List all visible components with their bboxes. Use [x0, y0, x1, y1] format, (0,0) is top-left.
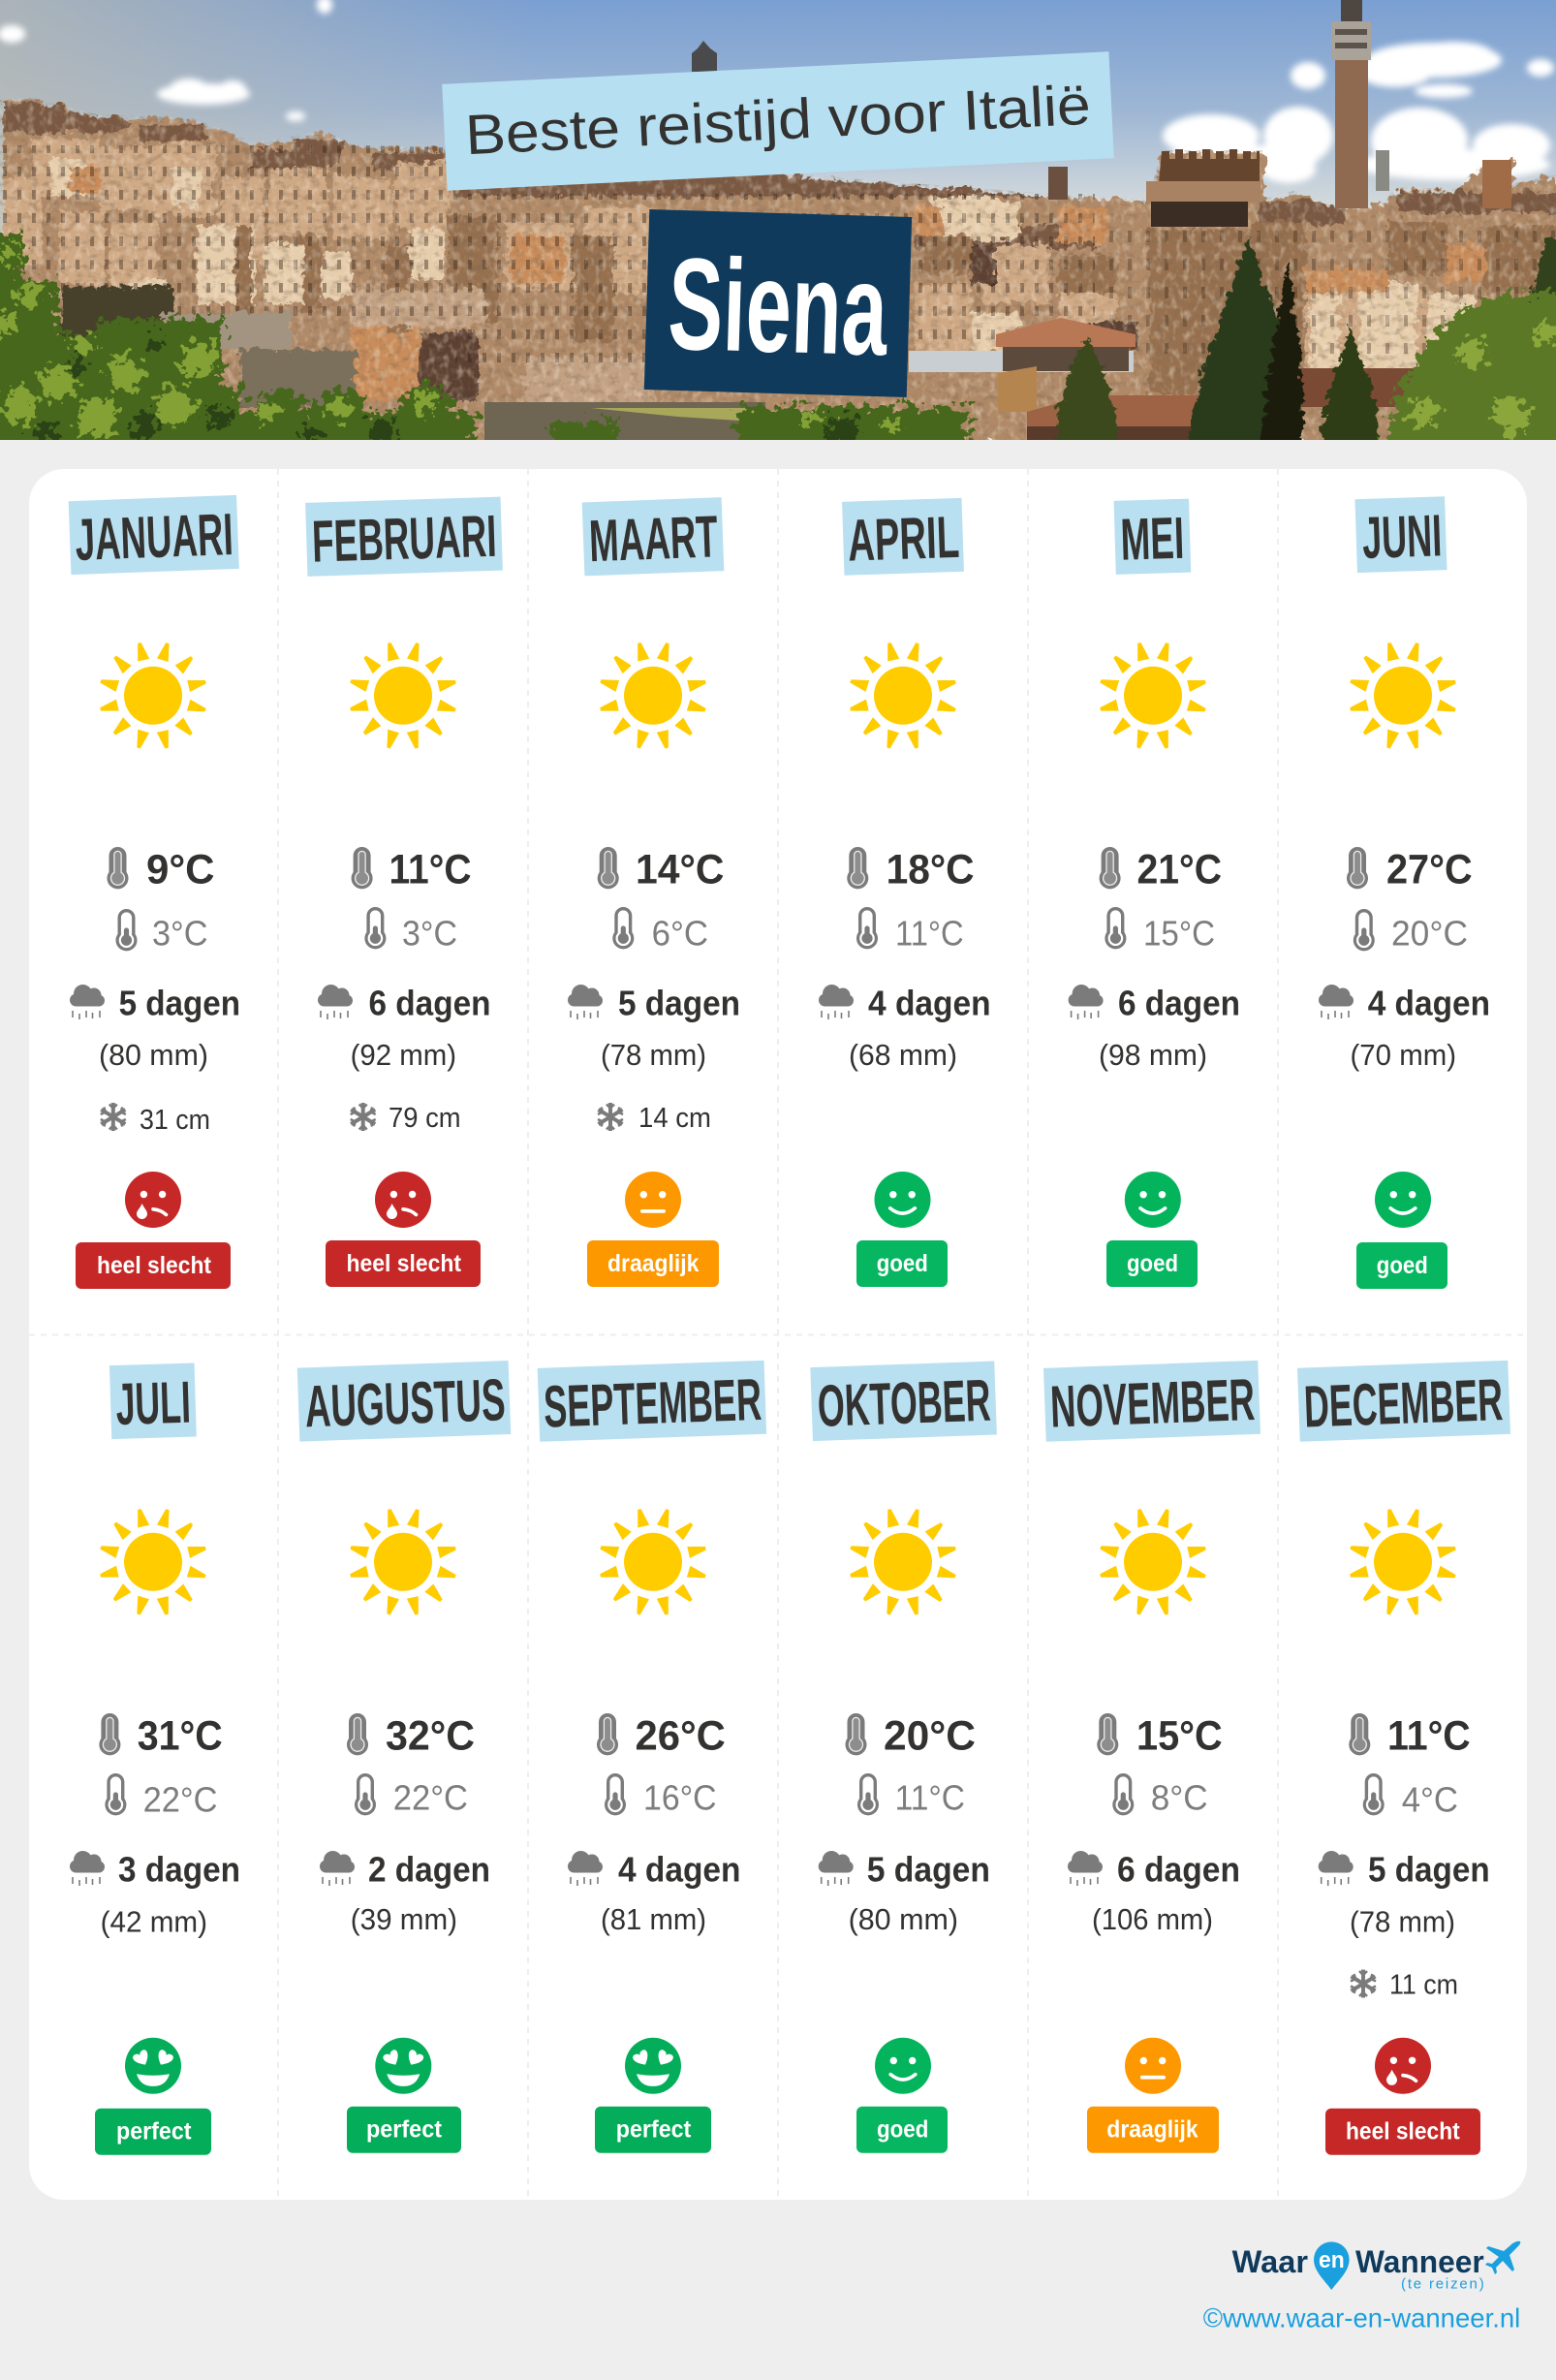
month panel: december: heel slecht	[1346, 2118, 1460, 2145]
month panel: maart: 6°C	[652, 914, 708, 954]
month panel: maart: 5 dagen	[618, 984, 740, 1023]
month panel: oktober: OKTOBER	[817, 1367, 992, 1439]
month panel: april: 11°C	[895, 914, 964, 954]
month panel: december: 4°C	[1402, 1779, 1458, 1819]
month panel: september: 26°C	[636, 1713, 726, 1760]
month panel: februari: 11°C	[389, 847, 471, 893]
month panel: november: draaglijk	[1106, 2116, 1198, 2144]
month panel: september: SEPTEMBER	[543, 1366, 762, 1440]
month panel: oktober: goed	[877, 2116, 928, 2144]
month panel: december: 11 cm	[1389, 1969, 1458, 2000]
month panel: juli: (42 mm)	[101, 1904, 207, 1938]
month panel: september	[538, 1361, 766, 2153]
month panel: januari: 9°C	[146, 847, 215, 893]
month panel: mei: 15°C	[1143, 914, 1215, 954]
month panel: november: 15°C	[1136, 1713, 1223, 1760]
month panel: januari: 3°C	[152, 914, 207, 954]
hero photo of Siena	[0, 0, 1556, 455]
month panel: oktober	[810, 1362, 997, 2153]
month panel: maart: MAART	[588, 503, 719, 574]
far tower	[692, 41, 717, 72]
month panel: februari: (92 mm)	[351, 1038, 456, 1072]
month panel: maart: draaglijk	[607, 1250, 699, 1277]
month panel: februari: 6 dagen	[368, 984, 490, 1023]
month panel: oktober: 20°C	[884, 1713, 976, 1760]
month panel: augustus: perfect	[366, 2116, 443, 2144]
month panel: januari: heel slecht	[97, 1252, 212, 1279]
logo: Waar en Wanneer: Waar	[1232, 2244, 1308, 2279]
month panel: juni: 20°C	[1391, 914, 1468, 954]
month panel: november: 6 dagen	[1117, 1850, 1240, 1890]
month panel: oktober: 5 dagen	[867, 1850, 990, 1890]
month panel: augustus	[297, 1361, 511, 2153]
month panel: juli	[70, 1362, 240, 2155]
month panel: januari: 31 cm	[140, 1105, 210, 1136]
month panel: februari: heel slecht	[347, 1250, 462, 1277]
month panel: juni: 27°C	[1386, 847, 1473, 893]
month panel: februari	[305, 497, 503, 1287]
month panel: oktober: 11°C	[895, 1777, 965, 1817]
month panel: juni	[1319, 496, 1490, 1289]
month panel: november: NOVEMBER	[1049, 1366, 1256, 1440]
month panel: juli: JULI	[115, 1369, 192, 1437]
month panel: mei: 21°C	[1137, 847, 1222, 893]
logo: Waar en Wanneer: en	[1319, 2247, 1345, 2273]
main tower	[1335, 58, 1368, 208]
month panel: juli: perfect	[116, 2118, 192, 2145]
month panel: mei: MEI	[1120, 505, 1185, 573]
hillside shadow and stone wall	[59, 283, 174, 338]
month panel: augustus: 22°C	[393, 1777, 468, 1817]
month panel: mei	[1069, 499, 1240, 1287]
month panel: september: 4 dagen	[618, 1850, 740, 1890]
title banner	[442, 51, 1114, 191]
month panel: januari	[69, 495, 240, 1289]
month panel: maart: 14°C	[636, 847, 724, 893]
crenellated palace	[1159, 149, 1260, 182]
month panel: september: (81 mm)	[601, 1902, 706, 1936]
month panel: februari: 3°C	[402, 914, 457, 954]
month panel: juni: goed	[1377, 1252, 1428, 1279]
month panel: juni: JUNI	[1361, 502, 1443, 571]
panel: climate table card	[29, 469, 1527, 2200]
month panel: april: 4 dagen	[868, 984, 991, 1023]
logo: Waar en Wanneer	[1232, 2241, 1520, 2293]
month panel: september: perfect	[616, 2116, 692, 2144]
month panel: april: APRIL	[847, 504, 960, 574]
month panel: augustus: 2 dagen	[368, 1850, 490, 1890]
month panel: augustus: 32°C	[386, 1713, 475, 1760]
month panel: maart	[568, 497, 740, 1287]
town base	[0, 97, 1556, 440]
month panel: februari: 79 cm	[389, 1103, 461, 1134]
logo: Waar en Wanneer: (te reizen)	[1401, 2276, 1484, 2293]
month panel: juli: 3 dagen	[118, 1850, 240, 1890]
month panel: oktober: (80 mm)	[849, 1902, 958, 1936]
month panel: april	[819, 498, 991, 1287]
month panel: december: 5 dagen	[1368, 1850, 1490, 1890]
month panel: april: 18°C	[887, 847, 975, 893]
month panel: maart: 14 cm	[638, 1103, 711, 1134]
month panel: december: 11°C	[1387, 1713, 1471, 1760]
trees	[0, 233, 969, 455]
city name block	[644, 209, 912, 397]
month panel: mei: 6 dagen	[1118, 984, 1240, 1023]
month panel: februari: FEBRUARI	[311, 503, 497, 575]
month panel: april: (68 mm)	[849, 1038, 957, 1072]
month panel: mei: (98 mm)	[1099, 1038, 1207, 1072]
logo: Waar en Wanneer: Wanneer	[1355, 2244, 1484, 2279]
month panel: juli: 22°C	[143, 1779, 217, 1819]
month panel: mei: goed	[1127, 1250, 1178, 1277]
month panel: januari: (80 mm)	[99, 1038, 208, 1072]
month panel: maart: (78 mm)	[601, 1038, 706, 1072]
title banner: Beste reistijd voor Italië	[464, 74, 1092, 167]
month panel: juli: 31°C	[138, 1713, 223, 1760]
month panel: april: goed	[877, 1250, 928, 1277]
month panel: augustus: AUGUSTUS	[304, 1366, 507, 1439]
parked cars	[909, 351, 1134, 372]
month panel: januari: JANUARI	[74, 501, 234, 573]
month panel: november: 8°C	[1151, 1777, 1208, 1817]
month panel: november: (106 mm)	[1092, 1902, 1213, 1936]
month panel: augustus: (39 mm)	[351, 1902, 457, 1936]
website credit: ©www.waar-en-wanneer.nl	[1203, 2303, 1520, 2333]
city name block: Siena	[667, 231, 890, 383]
pavilion and roofs	[996, 318, 1136, 347]
month panel: juni: 4 dagen	[1368, 984, 1490, 1023]
month panel: december	[1297, 1361, 1510, 2155]
month panel: juni: (70 mm)	[1351, 1038, 1456, 1072]
month panel: september: 16°C	[643, 1777, 717, 1817]
month panel: november	[1043, 1361, 1260, 2153]
month panel: januari: 5 dagen	[119, 984, 240, 1023]
month panel: december: (78 mm)	[1350, 1904, 1455, 1938]
